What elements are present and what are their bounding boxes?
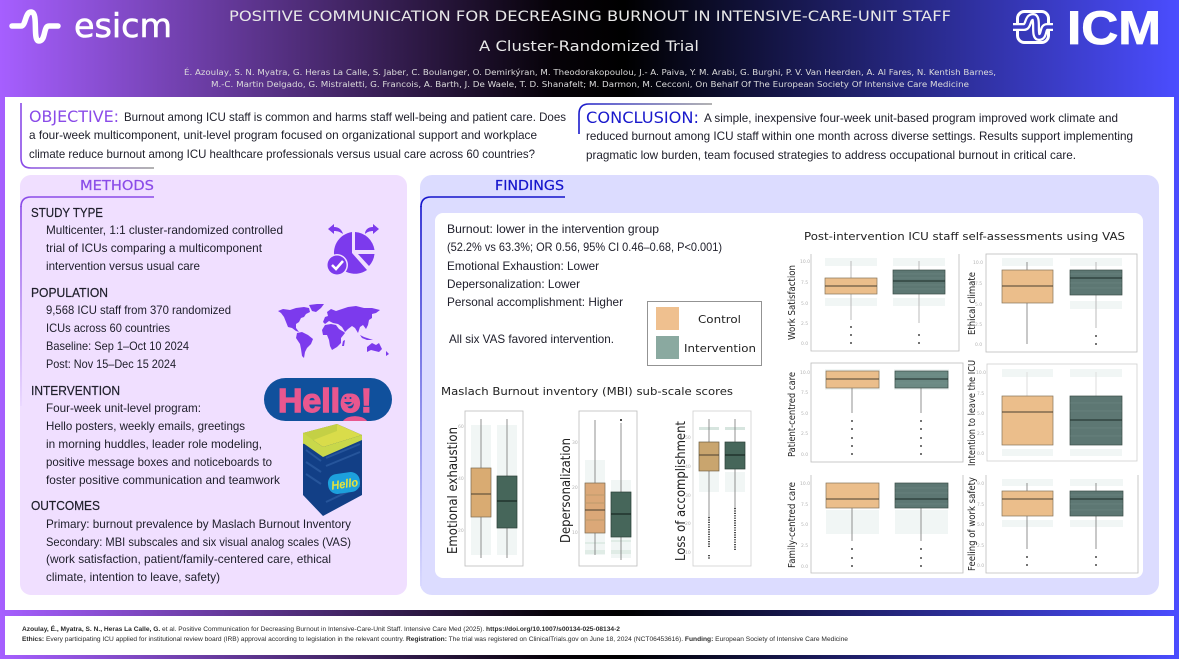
chart: ethical climate: Ethical climate xyxy=(967,272,978,335)
key results text: Depersonalization: Lower xyxy=(447,277,580,291)
chart: feeling of work safety: Feeling of work safety xyxy=(967,477,978,571)
chart: ethical climate: 7.5 xyxy=(975,281,982,287)
intervention: INTERVENTION xyxy=(31,384,120,398)
chart: work satisfaction: 7.5 xyxy=(801,280,808,286)
chart: family-centred care: 10.0 xyxy=(800,481,810,487)
chart: loss of accomplishment xyxy=(674,411,751,566)
chart: family-centred care xyxy=(787,475,963,573)
objective block: Burnout among ICU staff is common and harms staff well-being and patient care. Does xyxy=(124,110,566,124)
chart: work satisfaction: Work Satisfaction xyxy=(787,265,798,340)
panel: methods xyxy=(20,175,407,595)
chart: family-centred care: 5.0 xyxy=(801,522,808,528)
conclusion block: pragmatic low burden, team focused strategies to address occupational burnout in critical care. xyxy=(586,148,1076,162)
chart: feeling of work safety: 2.5 xyxy=(977,543,984,549)
chart: patient-centred care: 2.5 xyxy=(801,431,808,437)
chart: patient-centred care: 10.0 xyxy=(800,370,810,376)
authors xyxy=(184,66,996,89)
population: POPULATION xyxy=(31,286,108,300)
methods heading rule xyxy=(20,197,154,406)
chart: emotional exhaustion: Emotional exhaustion xyxy=(446,427,461,554)
chart: patient-centred care: 7.5 xyxy=(801,390,808,396)
logo: esicm xyxy=(12,6,172,45)
chart: loss of accomplishment: 10 xyxy=(685,550,691,556)
outcomes: climate, intention to leave, safety) xyxy=(46,570,220,584)
conclusion block: reduced burnout among ICU staff within one month across diverse settings. Results support implementing xyxy=(586,129,1133,143)
icon: message box: Hello xyxy=(330,475,359,493)
chart: feeling of work safety xyxy=(967,475,1138,573)
chart: loss of accomplishment: 20 xyxy=(685,521,691,527)
main white content area xyxy=(5,97,1174,610)
chart: depersonalization: Depersonalization xyxy=(559,438,574,543)
chart: loss of accomplishment: Loss of accomplishment xyxy=(674,421,689,561)
outcomes: Secondary: MBI subscales and six visual analog scales (VAS) xyxy=(46,535,351,549)
key results text: Burnout: lower in the intervention group xyxy=(447,222,659,236)
chart: patient-centred care: Patient-centred care xyxy=(787,372,798,457)
chart: feeling of work safety: 9.0 xyxy=(977,481,984,487)
chart: family-centred care: Family-centred care xyxy=(787,482,798,568)
chart: patient-centred care xyxy=(787,363,963,462)
logo: esicm: esicm xyxy=(74,6,172,45)
chart: ethical climate: 5.0 xyxy=(975,302,982,308)
key results text: All six VAS favored intervention. xyxy=(449,332,614,346)
icon: Hello badge xyxy=(264,378,392,421)
objective block xyxy=(21,103,566,168)
logo: ICM: ICM xyxy=(1067,1,1161,54)
chart: loss of accomplishment: 50 xyxy=(685,435,691,441)
icon: message box xyxy=(303,424,362,516)
chart: depersonalization: 20 xyxy=(572,485,578,491)
icon: pie chart with check xyxy=(326,224,379,276)
methods heading: METHODS xyxy=(80,179,154,194)
population: ICUs across 60 countries xyxy=(46,321,170,335)
chart: patient-centred care: 0.0 xyxy=(801,452,808,458)
chart: work satisfaction: 10.0 xyxy=(800,259,810,265)
intervention: Four-week unit-level program: xyxy=(46,401,201,415)
intervention: in morning huddles, leader role modeling, xyxy=(46,437,262,451)
study type xyxy=(31,206,283,273)
white findings card xyxy=(435,213,1143,578)
chart: intention to leave the ICU: 10.0 xyxy=(976,370,986,376)
population: 9,568 ICU staff from 370 randomized xyxy=(46,303,231,317)
chart: loss of accomplishment: 40 xyxy=(685,464,691,470)
VAS heading: Post-intervention ICU staff self-assessments using VAS xyxy=(804,230,1125,243)
chart: emotional exhaustion: 40 xyxy=(458,476,464,482)
chart: family-centred care: 7.5 xyxy=(801,502,808,508)
chart: loss of accomplishment: 30 xyxy=(685,493,691,499)
chart: work satisfaction xyxy=(787,254,959,351)
findings heading rule xyxy=(420,197,565,586)
chart: ethical climate: 10.0 xyxy=(973,260,983,266)
chart: work satisfaction: 0.0 xyxy=(801,341,808,347)
study type: intervention versus usual care xyxy=(46,259,200,273)
key results text: Personal accomplishment: Higher xyxy=(447,295,623,309)
conclusion block xyxy=(579,104,1133,162)
intervention xyxy=(31,384,281,487)
population: Baseline: Sep 1–Oct 10 2024 xyxy=(46,339,189,353)
chart: ethical climate xyxy=(967,254,1137,352)
MBI heading: Maslach Burnout inventory (MBI) sub-scale scores xyxy=(441,385,733,398)
panel: findings xyxy=(420,175,1159,595)
key results text xyxy=(447,222,722,346)
chart: emotional exhaustion xyxy=(446,411,523,566)
logo: ICM xyxy=(1013,1,1161,54)
chart: depersonalization xyxy=(559,411,637,566)
study type: STUDY TYPE xyxy=(31,206,103,220)
legend xyxy=(648,302,762,366)
footer white band xyxy=(5,616,1174,655)
authors: É. Azoulay, S. N. Myatra, G. Heras La Calle, S. Jaber, C. Boulanger, O. Demirkýran, M. Theodorakopoulou, J.- A. Paiva, Y. M. Arabi, G. Burghi, P. V. Van Heerden, A. Al Fares, N. Kentish Barnes, xyxy=(184,66,996,77)
chart: intention to leave the ICU: 7.5 xyxy=(977,391,984,397)
chart: feeling of work safety: 0.0 xyxy=(977,563,984,569)
chart: emotional exhaustion: 20 xyxy=(458,528,464,534)
intervention: foster positive communication and teamwork xyxy=(46,473,281,487)
outcomes: Primary: burnout prevalence by Maslach Burnout Inventory xyxy=(46,517,351,531)
population: Post: Nov 15–Dec 15 2024 xyxy=(46,357,176,371)
title: POSITIVE COMMUNICATION FOR DECREASING BURNOUT IN INTENSIVE-CARE-UNIT STAFF xyxy=(229,9,951,25)
study type: trial of ICUs comparing a multicomponent xyxy=(46,241,263,255)
key results text: Emotional Exhaustion: Lower xyxy=(447,259,599,273)
objective block: a four-week multicomponent, unit-level program focused on organizational support and workplace xyxy=(29,128,537,142)
key results text: (52.2% vs 63.3%; OR 0.56, 95% CI 0.46–0.68, P<0.001) xyxy=(447,240,722,254)
icon: Hello badge: Hello! xyxy=(278,382,372,419)
legend: Intervention xyxy=(684,343,756,355)
authors: M.-C. Martin Delgado, G. Mistraletti, G. Francois, A. Barth, J. De Waele, T. D. Shanafelt; M. Darmon, M. Cecconi, On Behalf Of The European Society Of Intensive Care Medicine xyxy=(211,80,969,89)
objective block: OBJECTIVE: xyxy=(29,107,119,126)
objective block: climate reduce burnout among ICU healthcare professionals versus usual care across 60 countries? xyxy=(29,147,535,161)
subtitle: A Cluster-Randomized Trial xyxy=(479,39,699,55)
chart: ethical climate: 2.5 xyxy=(975,322,982,328)
findings heading: FINDINGS xyxy=(495,179,564,194)
outcomes: (work satisfaction, patient/family-centered care, ethical xyxy=(46,552,331,566)
chart: emotional exhaustion: 60 xyxy=(458,424,464,430)
population xyxy=(31,286,231,371)
chart: ethical climate: 0.0 xyxy=(975,342,982,348)
chart: family-centred care: 0.0 xyxy=(801,564,808,570)
outcomes xyxy=(31,499,351,584)
icon: world map xyxy=(278,304,389,358)
conclusion block: CONCLUSION: xyxy=(586,108,699,127)
conclusion block: A simple, inexpensive four-week unit-based program improved work climate and xyxy=(704,111,1118,125)
chart: feeling of work safety: 5.0 xyxy=(977,522,984,528)
footer citation xyxy=(22,624,848,643)
chart: intention to leave the ICU: Intention to leave the ICU xyxy=(967,360,978,466)
legend: Control xyxy=(698,314,741,326)
intervention: positive message boxes and noticeboards to xyxy=(46,455,272,469)
footer citation: Azoulay, É., Myatra, S. N., Heras La Calle, G. et al. Positive Communication for Decreasing Burnout in Intensive-Care-Unit Staff. Intensive Care Med (2025). https://doi.org/10.1007/s00134-025-08134-2 xyxy=(22,624,620,633)
chart: intention to leave the ICU: 0.0 xyxy=(977,451,984,457)
outcomes: OUTCOMES xyxy=(31,499,100,513)
chart: intention to leave the ICU: 5.0 xyxy=(977,411,984,417)
intervention: Hello posters, weekly emails, greetings xyxy=(46,419,245,433)
chart: feeling of work safety: 7.5 xyxy=(977,502,984,508)
chart: work satisfaction: 2.5 xyxy=(801,321,808,327)
chart: intention to leave the ICU xyxy=(967,360,1137,466)
footer citation: Ethics: Every participating ICU applied for institutional review board (IRB) approval according to legislation in the relevant country. Registration: The trial was registered on ClinicalTrials.gov on June 18, 2024 (NCT06453616). Funding: European Society of Intensive Care Medicine xyxy=(22,636,848,643)
chart: work satisfaction: 5.0 xyxy=(801,301,808,307)
study type: Multicenter, 1:1 cluster-randomized controlled xyxy=(46,223,283,237)
chart: patient-centred care: 5.0 xyxy=(801,411,808,417)
chart: depersonalization: 10 xyxy=(572,530,578,536)
chart: family-centred care: 2.5 xyxy=(801,543,808,549)
chart: intention to leave the ICU: 2.5 xyxy=(977,431,984,437)
chart: depersonalization: 30 xyxy=(572,440,578,446)
